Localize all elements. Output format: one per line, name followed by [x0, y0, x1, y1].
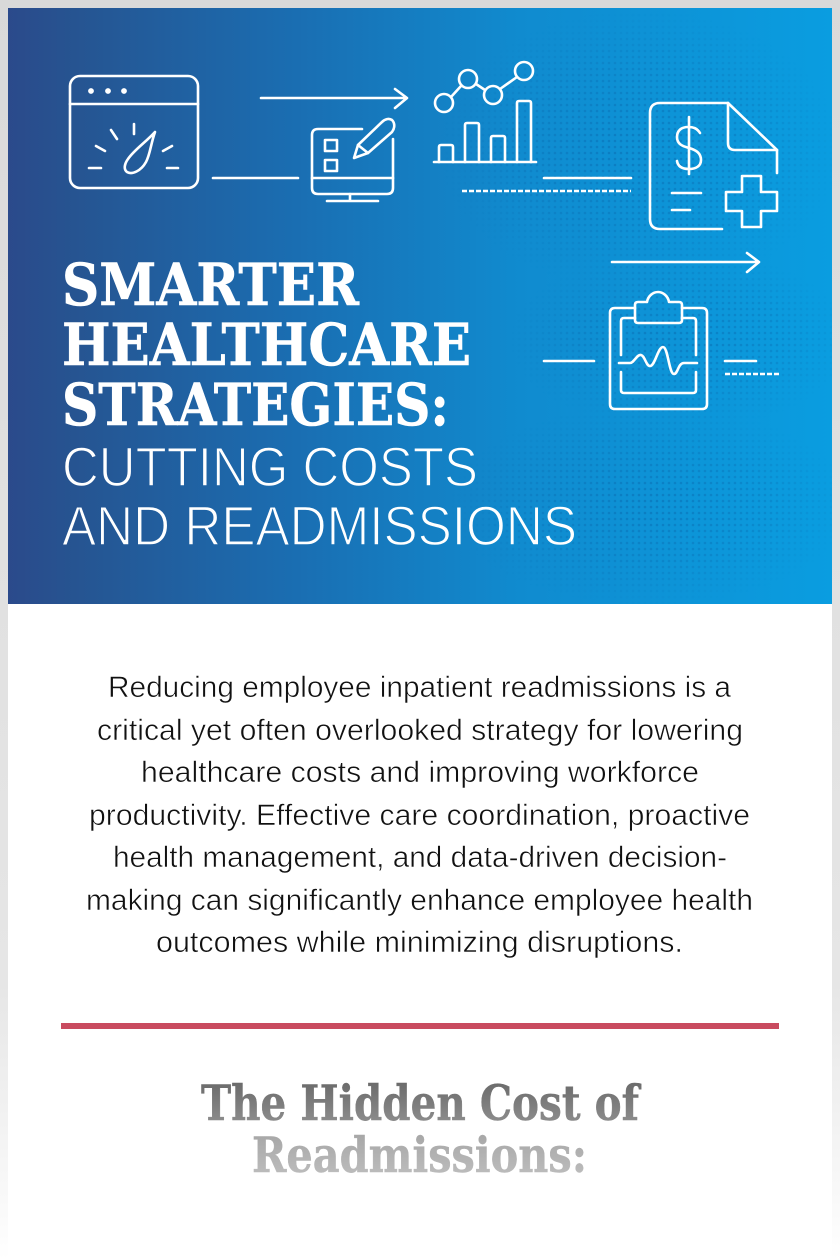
section heading: The Hidden Cost of — [201, 1074, 641, 1132]
arrow: top — [261, 89, 407, 108]
panel: blue header — [8, 8, 832, 604]
title: AND READMISSIONS — [62, 494, 577, 557]
connector line — [213, 177, 298, 179]
connector lines: clipboard — [544, 361, 779, 374]
white content panel — [8, 604, 832, 1260]
icon: browser speed gauge — [70, 76, 198, 188]
intro paragraph: outcomes while minimizing disruptions. — [156, 926, 683, 959]
connector lines — [462, 178, 631, 191]
intro paragraph: healthcare costs and improving workforce — [141, 756, 699, 789]
intro paragraph — [86, 671, 753, 959]
title: STRATEGIES: — [62, 371, 449, 439]
intro paragraph: health management, and data-driven decision- — [113, 841, 727, 874]
title: HEALTHCARE — [62, 311, 471, 379]
icon: line and bar chart — [434, 62, 536, 162]
title: CUTTING COSTS — [62, 435, 478, 498]
icon: medical bill document — [650, 103, 777, 229]
intro paragraph: Reducing employee inpatient readmissions is a — [108, 671, 731, 704]
section heading — [201, 1074, 641, 1184]
intro paragraph: critical yet often overlooked strategy for lowering — [97, 714, 743, 747]
title — [62, 251, 577, 557]
icon: clipboard with heartbeat — [610, 292, 707, 409]
intro paragraph: productivity. Effective care coordination, proactive — [89, 799, 750, 832]
title: SMARTER — [62, 251, 360, 319]
arrow: lower — [612, 253, 759, 272]
intro paragraph: making can significantly enhance employee health — [86, 884, 753, 917]
section heading: Readmissions: — [252, 1126, 587, 1184]
icon: monitor with checklist and pencil — [312, 119, 394, 201]
red divider — [61, 1023, 779, 1029]
